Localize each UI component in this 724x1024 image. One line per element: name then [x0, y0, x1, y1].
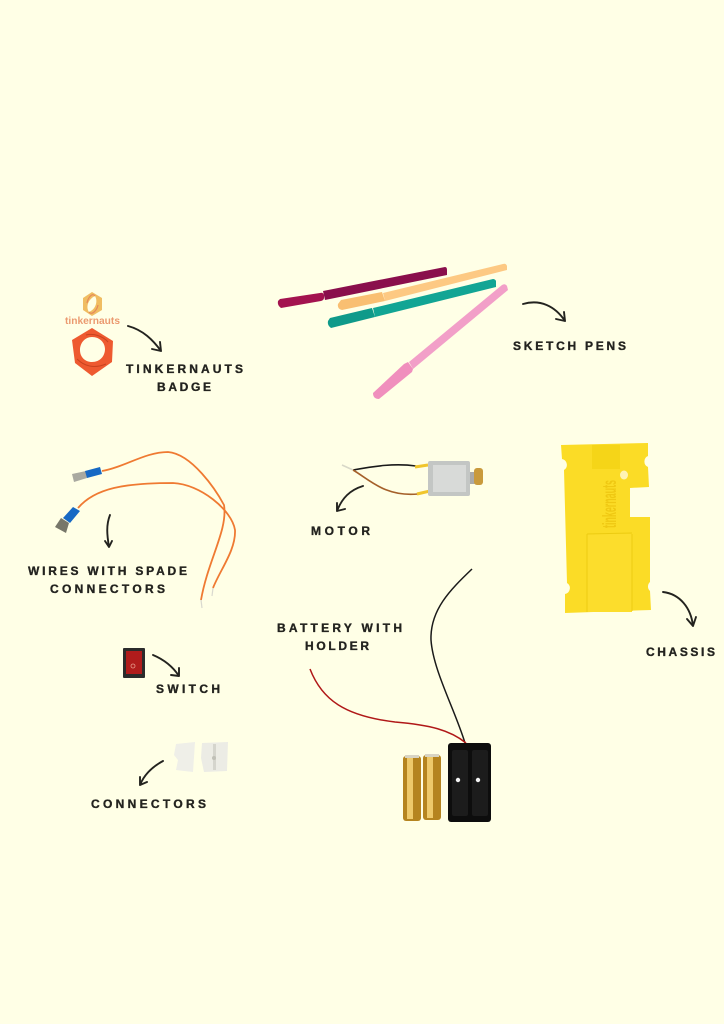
icon: motor wires — [342, 465, 430, 494]
panel: connectors — [91, 742, 228, 811]
label: BATTERY WITH — [277, 621, 402, 635]
icon: rocker switch — [123, 648, 145, 678]
arrow — [663, 592, 696, 626]
icon: maroon pen — [278, 267, 447, 308]
icon: yellow chassis — [561, 443, 651, 613]
icon: wire tips — [201, 588, 213, 608]
panel: switch — [123, 648, 220, 696]
panel: tinkernauts badge — [65, 292, 243, 394]
icon: white connectors — [174, 742, 228, 772]
icon: orange wires — [78, 452, 235, 600]
icon: peach pen — [338, 264, 507, 310]
arrow — [337, 486, 363, 511]
label: HOLDER — [305, 639, 369, 653]
panel: battery with holder — [277, 569, 491, 822]
label: CHASSIS — [646, 645, 715, 659]
arrow — [153, 655, 179, 676]
arrow — [105, 515, 112, 547]
label: MOTOR — [311, 524, 370, 538]
label: SWITCH — [156, 682, 220, 696]
label: BADGE — [157, 380, 211, 394]
icon: tinkernauts logo — [65, 292, 120, 327]
label: CONNECTORS — [50, 582, 165, 596]
icon: battery holder — [448, 743, 491, 822]
icon: battery wires — [310, 569, 472, 743]
panel: sketch pens — [278, 264, 626, 399]
arrow — [128, 326, 161, 351]
icon: orange hex badge — [72, 328, 113, 376]
icon: batteries — [403, 754, 441, 821]
arrow — [523, 302, 565, 321]
icon: motor body — [428, 461, 483, 496]
panel: wires with spade connectors — [28, 452, 235, 608]
arrow — [140, 761, 163, 785]
label: WIRES WITH SPADE — [28, 564, 187, 578]
label: TINKERNAUTS — [126, 362, 243, 376]
icon: pink pen — [373, 284, 508, 399]
icon: teal pen — [328, 279, 496, 328]
panel: chassis — [561, 443, 715, 659]
icon: tinkernauts logo: tinkernauts — [65, 315, 120, 327]
icon: spade connector top — [72, 467, 102, 482]
panel: motor — [311, 461, 483, 538]
icon: yellow chassis: tinkernauts — [600, 480, 621, 528]
icon: spade connector bottom — [55, 507, 80, 533]
label: CONNECTORS — [91, 797, 206, 811]
label: SKETCH PENS — [513, 339, 626, 353]
